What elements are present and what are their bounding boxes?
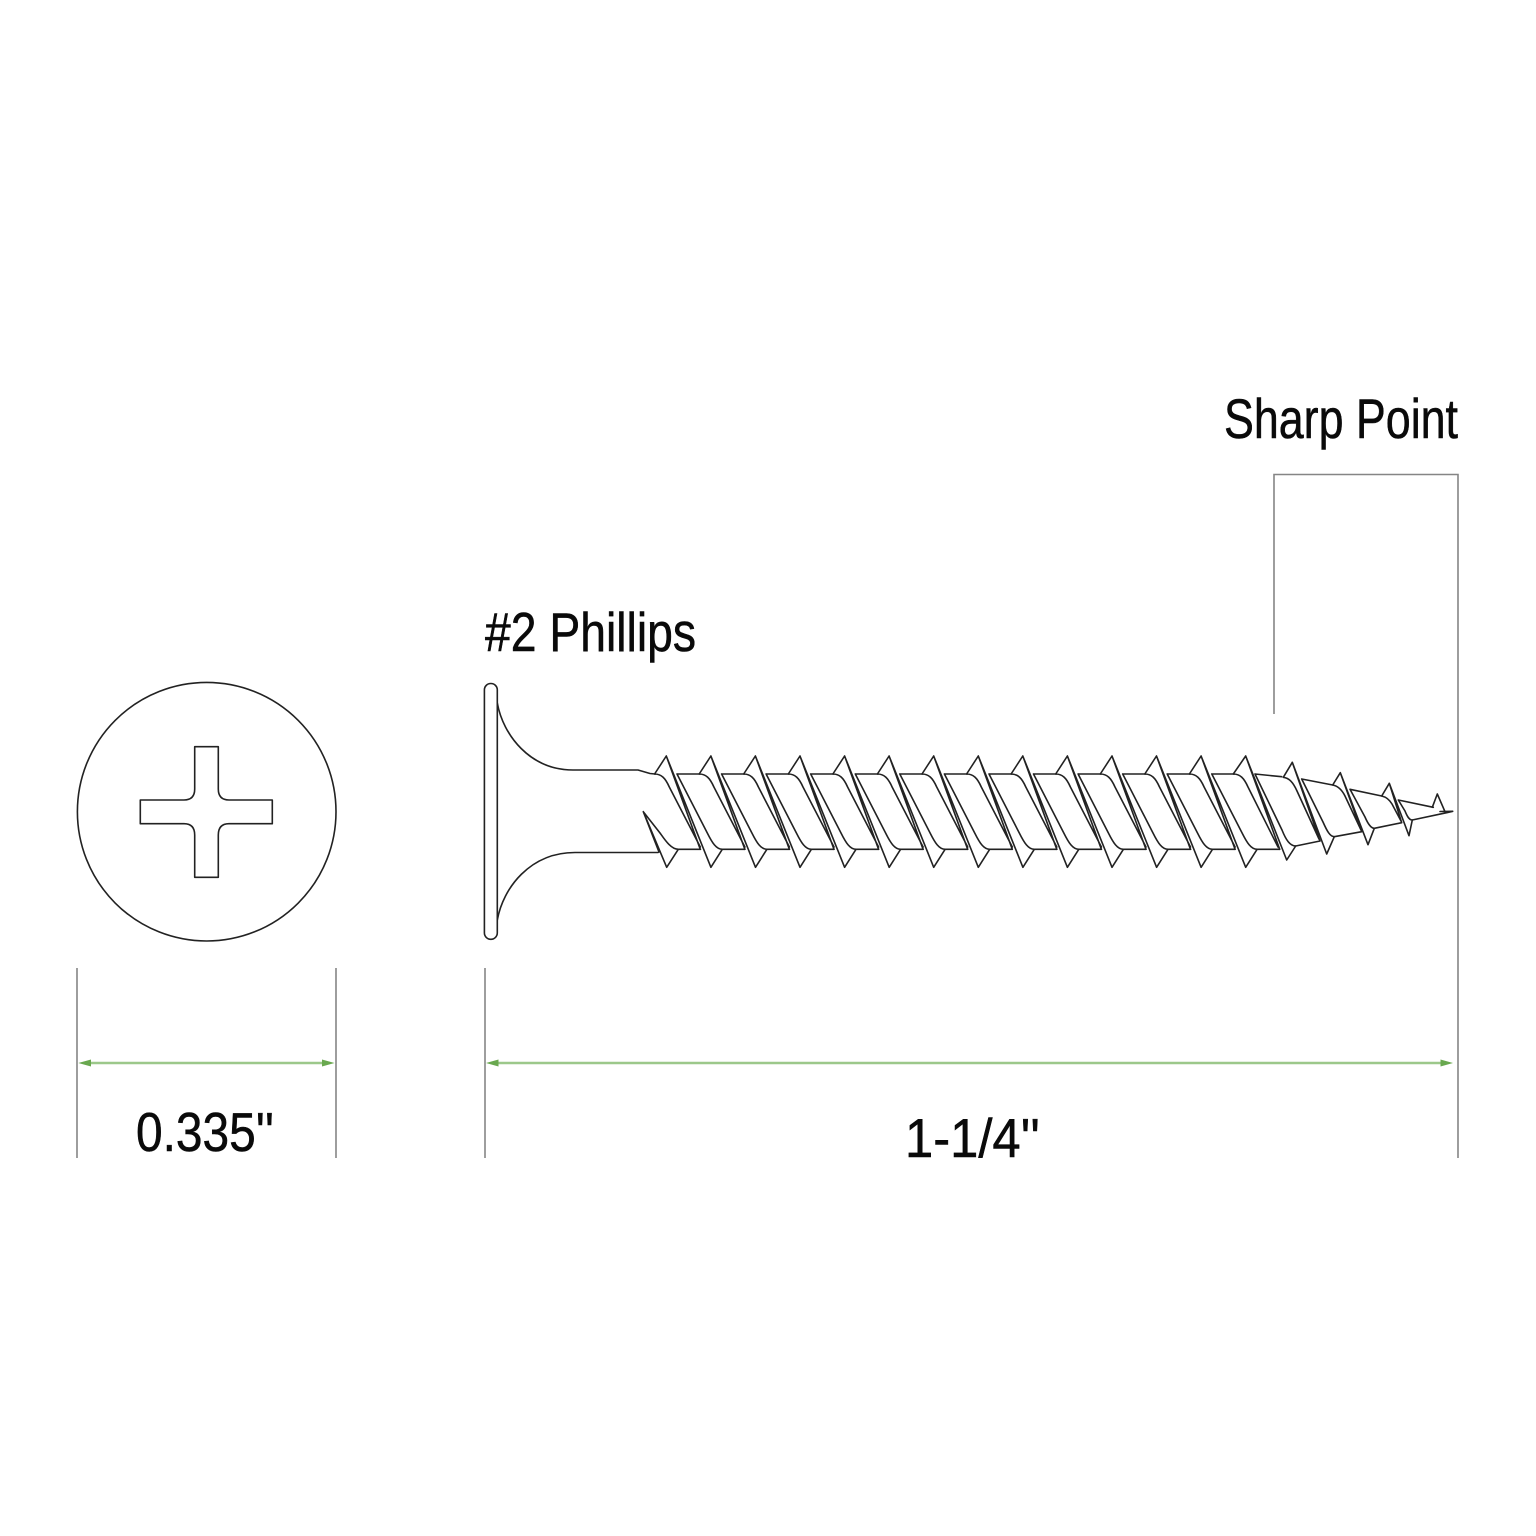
label: #2 Phillips: #2 Phillips (485, 601, 696, 663)
arrow: screw length (486, 1060, 1453, 1066)
screw threads (655, 756, 1280, 867)
arrow: head diameter (78, 1060, 335, 1066)
screw side view (484, 684, 1453, 939)
screw head top view (77, 682, 336, 941)
dimension: screw length (485, 968, 1453, 1169)
label: Sharp Point: Sharp Point (1224, 387, 1458, 450)
label: 1-1/4 inch: 1-1/4'' (905, 1107, 1040, 1169)
icon: phillips cross recess (140, 747, 272, 877)
label: 0.335 inch: 0.335'' (136, 1101, 274, 1163)
screw neck and shank (497, 703, 700, 920)
dimension: head diameter (77, 968, 336, 1163)
screw head flange (484, 684, 497, 939)
tapered screw tip (1233, 756, 1296, 860)
leader bracket: Sharp Point (1274, 474, 1458, 1158)
